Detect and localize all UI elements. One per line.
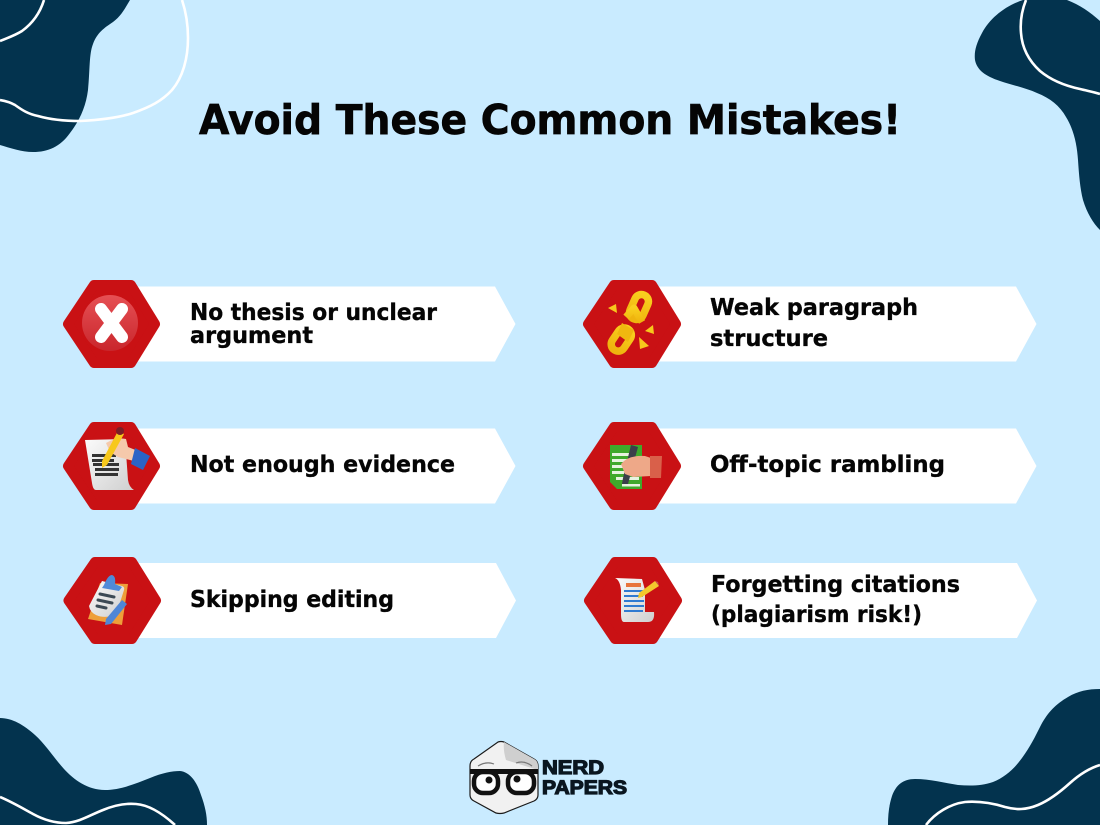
icon: red x: [82, 295, 138, 351]
logo mascot: [470, 742, 538, 814]
logo wordmark: NERD: [542, 758, 604, 779]
item: off-topic rambling: [588, 427, 1036, 505]
label: structure: [710, 326, 828, 352]
decorative blob: bottom left: [0, 718, 207, 825]
label: [190, 300, 438, 349]
icon: hand writing on paper: [85, 427, 150, 490]
logo wordmark: PAPERS: [542, 778, 627, 799]
ribbon: [651, 563, 1037, 638]
label: (plagiarism risk!): [711, 602, 922, 628]
title: Avoid These Common Mistakes!: [199, 96, 901, 144]
ribbon: [650, 286, 1036, 362]
logo wordmark: [542, 758, 627, 799]
decorative blob: top left: [0, 0, 188, 152]
icon: broken chain: [608, 292, 654, 354]
item: no thesis: [68, 285, 516, 363]
label: Off-topic rambling: [710, 452, 945, 478]
decorative blob: top right: [975, 0, 1100, 230]
icon: clipboard and pen: [88, 575, 128, 625]
label: Forgetting citations: [711, 572, 960, 598]
item: not enough evidence: [68, 427, 516, 505]
icon: hand with pen on green sheet: [610, 445, 662, 489]
hexagon badge: [68, 285, 155, 363]
ribbon: [130, 563, 516, 638]
label: argument: [190, 323, 313, 349]
logo: nerd papers: [470, 742, 627, 814]
label: Not enough evidence: [190, 452, 455, 478]
ribbon: [130, 286, 516, 362]
icon: scroll and pencil: [615, 578, 659, 622]
hexagon badge: [588, 427, 676, 505]
decorative blob: bottom right: [888, 689, 1100, 825]
label: Skipping editing: [190, 587, 394, 613]
label: Weak paragraph: [710, 295, 918, 321]
ribbon: [130, 428, 516, 504]
label: [710, 295, 918, 352]
item: forgetting citations: [589, 562, 1037, 639]
hexagon badge: [68, 427, 155, 505]
hexagon badge: [68, 562, 156, 639]
item: skipping editing: [68, 562, 516, 639]
hexagon badge: [589, 562, 677, 639]
label: [711, 572, 960, 628]
label: No thesis or unclear: [190, 300, 438, 326]
ribbon: [650, 428, 1036, 504]
item: weak paragraph: [588, 285, 1036, 363]
hexagon badge: [588, 285, 676, 363]
